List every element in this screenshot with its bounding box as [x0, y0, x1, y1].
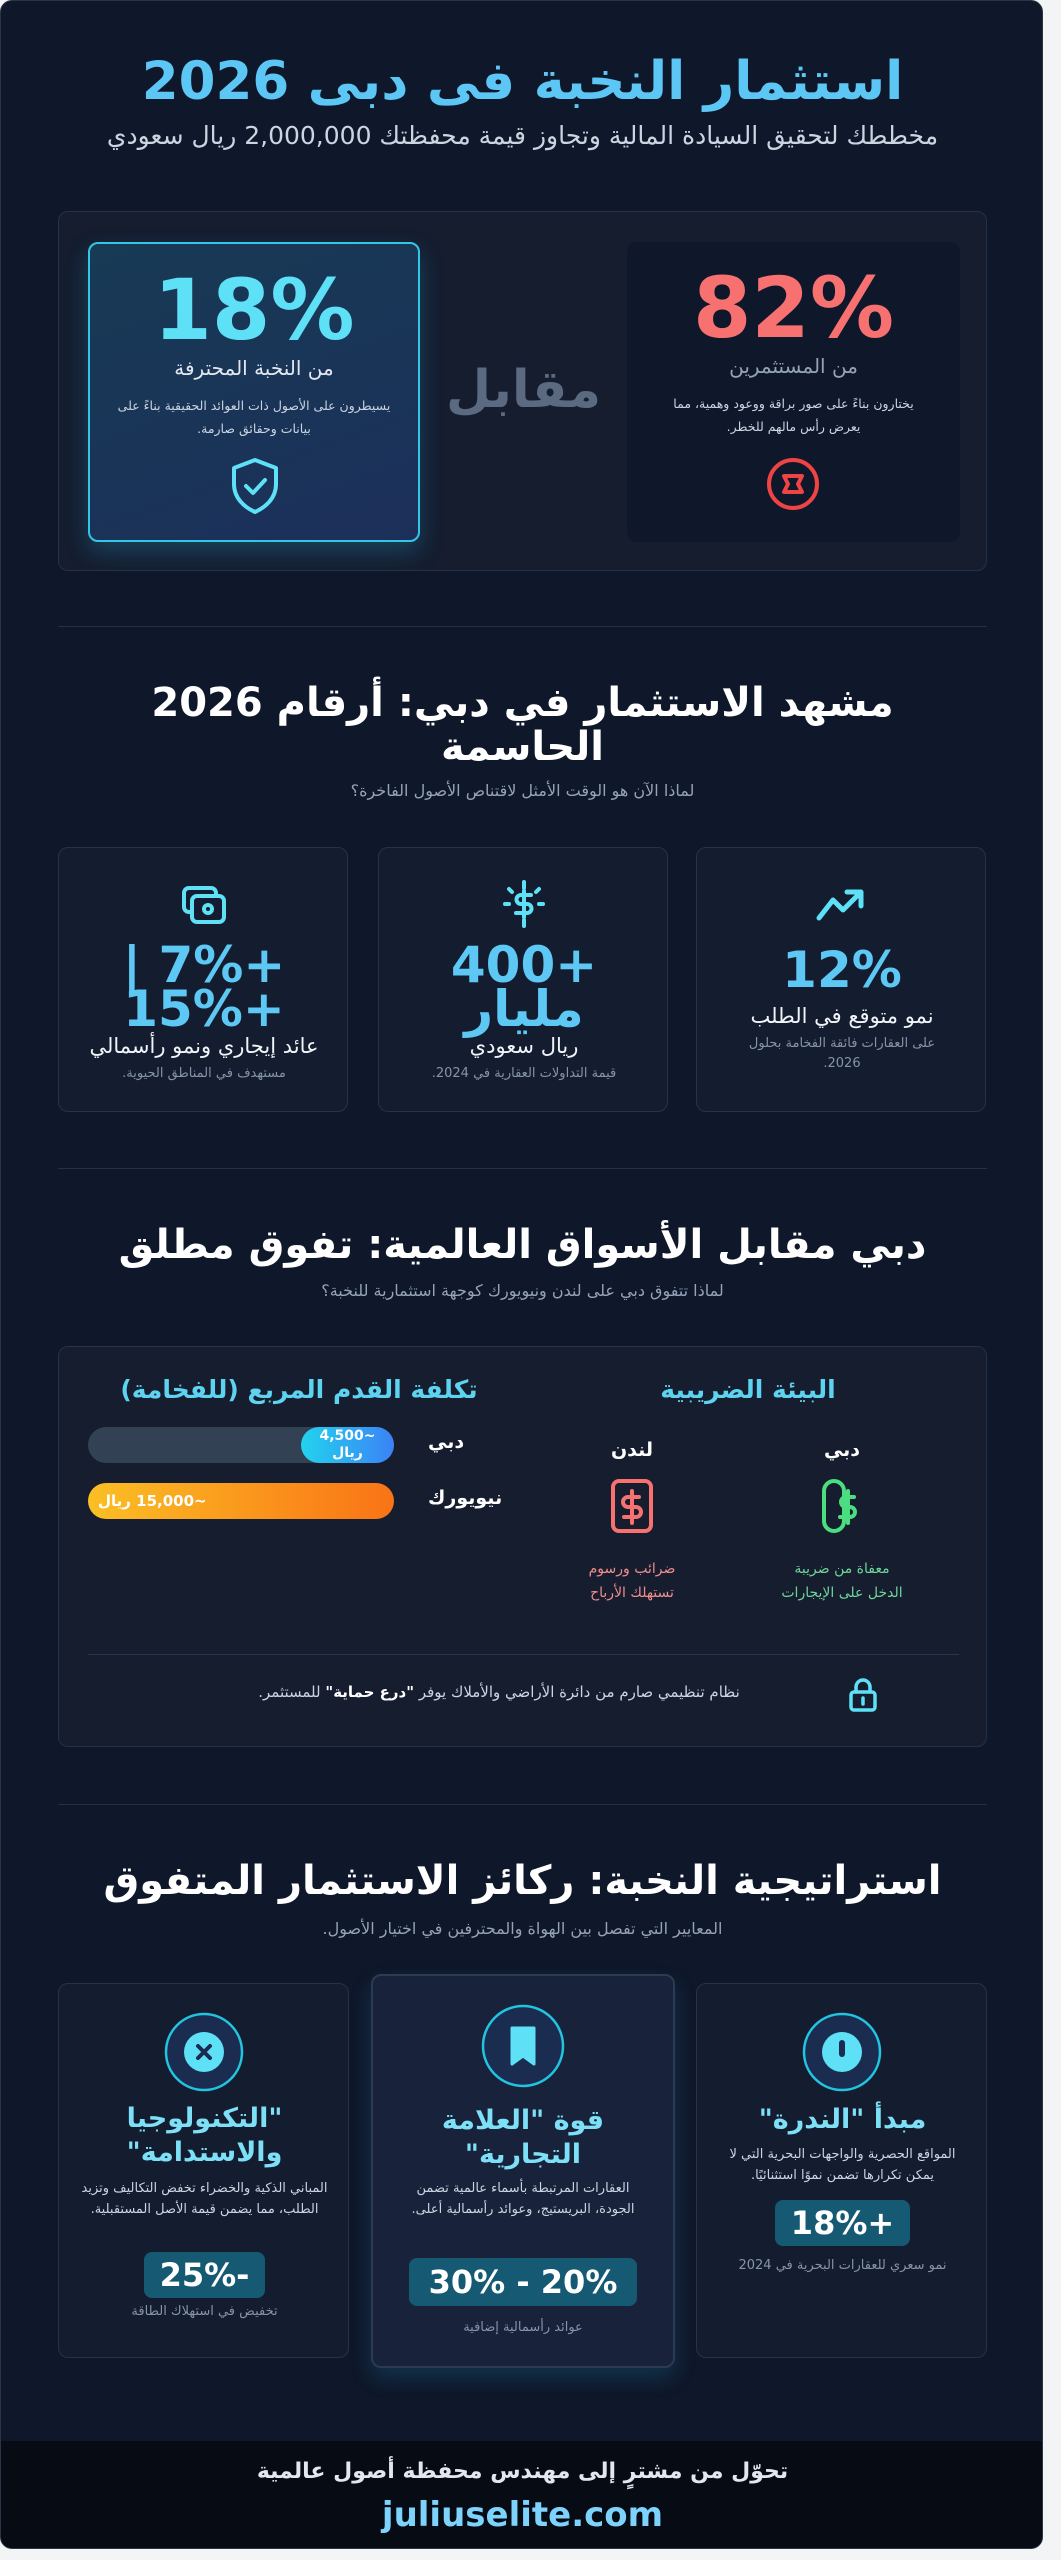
tax: dubai: دبي — [824, 1439, 860, 1461]
number: +7% | — [123, 936, 285, 994]
icon: dollar red — [611, 1479, 653, 1533]
label investors: من المستثمرين — [729, 354, 858, 378]
stat card: 400+ billion — [378, 847, 668, 1112]
label: ريال سعودي — [470, 1034, 578, 1058]
icon: cash stack — [182, 886, 226, 924]
panel: elite vs investors comparison — [58, 211, 987, 571]
title: التجارية" — [465, 2139, 581, 2170]
number — [123, 936, 285, 1038]
subtitle section 3: لماذا تتفوق دبي على لندن ونيويورك كوجهة استثمارية للنخبة؟ — [321, 1281, 724, 1300]
description elite: يسيطرون على الأصول ذات العوائد الحقيقية بناءً على بيانات وحقائق صارمة. — [118, 398, 390, 436]
icon: dollar green — [822, 1479, 857, 1533]
bar: new york — [88, 1483, 502, 1519]
number: +15% — [123, 980, 285, 1038]
label elite: من النخبة المحترفة — [174, 356, 334, 380]
bar: new york: نيويورك — [428, 1487, 502, 1509]
title — [127, 2103, 282, 2168]
icon: lock — [849, 1678, 877, 1712]
badge: 25%- — [160, 2256, 249, 2294]
desc: المباني الذكية والخضراء تخفض التكاليف وتزيد الطلب، مما يضمن قيمة الأصل المستقبلية. — [82, 2181, 327, 2217]
bar: dubai — [88, 1427, 464, 1463]
label: نمو متوقع في الطلب — [750, 1004, 934, 1028]
stat card: 12% — [696, 847, 986, 1112]
icon: x circle — [164, 2012, 244, 2092]
note: نمو سعري للعقارات البحرية في 2024 — [738, 2258, 947, 2273]
heading: section 3: دبي مقابل الأسواق العالمية: تفوق مطلق — [119, 1222, 926, 1268]
desc: العقارات المرتبطة بأسماء عالمية تضمن الجودة، البريستيج، وعوائد رأسمالية أعلى. — [412, 2181, 634, 2217]
subtitle section 2: لماذا الآن هو الوقت الأمثل لاقتناص الأصول الفاخرة؟ — [351, 781, 694, 800]
box: elite 18% — [88, 242, 420, 542]
number: 12% — [782, 941, 902, 999]
number: +400 — [451, 936, 597, 994]
badge: 18%+ — [791, 2204, 894, 2242]
footer url: juliuselite.com — [382, 2495, 663, 2535]
subtitle: مخططك لتحقيق السيادة المالية وتجاوز قيمة محفظتك 2,000,000 ريال سعودي — [107, 121, 938, 150]
bar: dubai: ~4,500 — [319, 1428, 376, 1444]
icon: bookmark — [482, 2004, 564, 2088]
pillar card: tech — [58, 1983, 349, 2358]
title: قوة "العلامة — [442, 2105, 604, 2136]
title: مبدأ "الندرة" — [759, 2104, 926, 2135]
tax: london: ضرائب ورسوم — [589, 1561, 675, 1577]
tax: london — [589, 1439, 675, 1601]
number: مليار — [464, 980, 584, 1038]
note: مستهدف في المناطق الحيوية. — [122, 1066, 286, 1081]
title: استثمار النخبة فى دبى 2026 — [142, 51, 903, 112]
note: عوائد رأسمالية إضافية — [463, 2320, 583, 2335]
tax: dubai: معفاة من ضريبة — [794, 1561, 890, 1577]
label: عائد إيجاري ونمو رأسمالي — [89, 1034, 319, 1058]
title: والاستدامة" — [127, 2137, 282, 2168]
bar: new york: ~15,000 ريال — [98, 1492, 207, 1510]
icon: money — [503, 880, 545, 928]
number 82%: 82% — [693, 259, 894, 357]
tax: london: لندن — [611, 1439, 653, 1461]
stat card: yield — [58, 847, 348, 1112]
number — [451, 936, 597, 1038]
tax: london: تستهلك الأرباح — [590, 1585, 674, 1601]
tax: dubai — [781, 1439, 903, 1601]
icon: trend up — [816, 890, 864, 920]
description investors: يختارون بناءً على صور براقة ووعود وهمية، مما يعرض رأس مالهم للخطر. — [673, 396, 914, 434]
note: تخفيض في استهلاك الطاقة — [131, 2304, 278, 2319]
note: قيمة التداولات العقارية في 2024. — [432, 1066, 616, 1081]
icon: exclamation circle — [802, 2012, 882, 2092]
heading: section 4: استراتيجية النخبة: ركائز الاستثمار المتفوق — [104, 1858, 941, 1904]
panel: global comparison — [58, 1346, 987, 1747]
heading: price per sqft: تكلفة القدم المربع (للفخامة) — [120, 1375, 478, 1404]
pillar card: brand — [371, 1974, 675, 2368]
callout: regulation lock: نظام تنظيمي صارم من دائرة الأراضي والأملاك يوفر "درع حماية" للمستثمر. — [258, 1683, 740, 1701]
icon: alarm circle — [767, 458, 819, 510]
bar: dubai: دبي — [428, 1431, 464, 1453]
box: investors 82% — [627, 242, 960, 542]
tax: dubai: الدخل على الإيجارات — [781, 1585, 903, 1601]
number 18%: 18% — [153, 261, 355, 359]
desc: المواقع الحصرية والواجهات البحرية التي لا يمكن تكرارها تضمن نموًا استثنائيًا. — [729, 2147, 956, 2183]
footer — [1, 2441, 1044, 2550]
bar: dubai: ريال — [332, 1445, 363, 1461]
title — [442, 2105, 604, 2170]
subtitle section 4: المعايير التي تفصل بين الهواة والمحترفين في اختيار الأصول. — [323, 1919, 722, 1938]
icon: shield check — [232, 458, 278, 514]
label: versus: مقابل — [446, 360, 601, 420]
footer tagline: تحوّل من مشترٍ إلى مهندس محفظة أصول عالمية — [257, 2459, 788, 2484]
note: على العقارات فائقة الفخامة بحلول 2026. — [749, 1036, 935, 1071]
heading: tax environment: البيئة الضريبية — [660, 1375, 836, 1404]
pillar card: scarcity — [696, 1983, 987, 2358]
title: "التكنولوجيا — [127, 2103, 282, 2134]
heading: section 2: مشهد الاستثمار في دبي: أرقام 2026 الحاسمة — [151, 680, 894, 770]
badge: 30% - 20% — [429, 2263, 617, 2301]
callout: regulation lock — [258, 1678, 877, 1712]
